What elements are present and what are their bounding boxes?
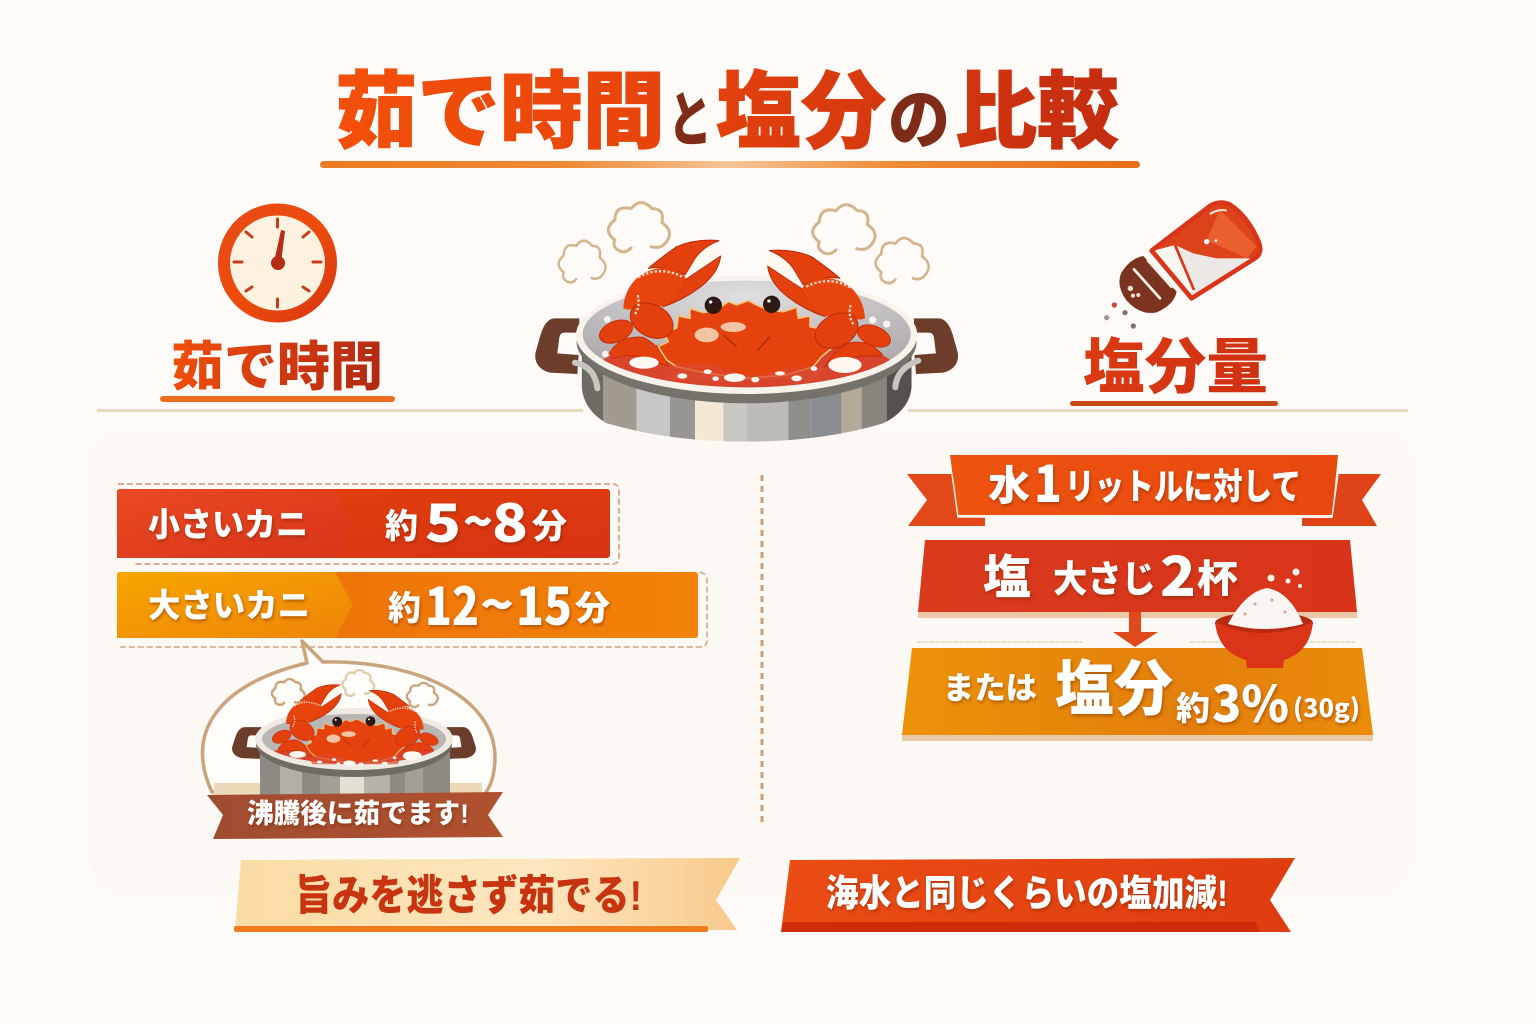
ribbon: per litre of water: 1 [1034,445,1062,517]
ribbon: keep the umami: 旨みを逃さず茹でる! [295,872,642,919]
pot handles [535,318,958,374]
time bar: small crab [117,482,619,564]
bar: two tablespoons of salt: 杯 [1197,559,1238,601]
time bar: small crab: 小さいカニ [148,506,308,543]
bar: two tablespoons of salt [918,533,1357,618]
section rule right [908,409,1408,412]
title: 比較 [955,65,1119,159]
ribbon: per litre of water: リットルに対して [1065,466,1301,507]
bar: two tablespoons of salt: 大さじ [1053,559,1156,600]
steam clouds [559,203,929,283]
pot side brackets [575,363,597,388]
icon: salt shaker [1104,197,1270,329]
time bar: small crab: ~ [463,483,493,555]
bar: or salinity about 3 percent: または [943,671,1037,706]
title [335,65,1119,159]
bar: or salinity about 3 percent: 3% [1212,665,1289,737]
time bar: small crab: 約 [385,508,418,546]
icon: clock [218,204,337,322]
bar: two tablespoons of salt: 塩 [983,551,1031,604]
time bar: small crab: 8 [492,482,528,557]
crab [596,240,894,382]
time bar: small crab: 5 [425,482,461,557]
ribbon: same as sea water: 海水と同じくらいの塩加減! [826,873,1228,914]
time bar: large crab: 15 [516,565,572,640]
time bar: large crab: 12 [425,565,479,640]
title: と [668,87,712,154]
icon: salt bowl [1215,568,1313,668]
ribbon: same as sea water [781,858,1295,932]
bar: or salinity about 3 percent [902,648,1373,741]
section rule left [97,409,583,412]
title underline [320,161,1140,168]
illustration: crab in pot [535,203,958,443]
bar: or salinity about 3 percent: 約 [1176,690,1210,727]
ribbon: per litre of water: 水 [988,463,1030,509]
small steam [272,670,438,707]
small pot [232,708,476,800]
title: 茹で時間 [335,65,665,159]
bar: or salinity about 3 percent: (30g) [1293,689,1360,725]
time bar: large crab: 大さいカニ [148,587,310,624]
separator lines [917,641,1355,643]
ribbon: after boiling [207,792,503,839]
ribbon: per litre of water [907,445,1381,526]
infographic canvas [97,68,1408,932]
time bar: large crab [117,565,707,647]
time bar: large crab: ~ [480,566,514,638]
content panel [90,430,1412,893]
speech bubble: boiling pot [202,641,495,800]
bar: two tablespoons of salt: 2 [1160,533,1196,612]
time bar: large crab: 分 [575,590,610,628]
ribbon: keep the umami [234,858,740,932]
time bar: small crab: 分 [532,508,567,546]
small crab [270,685,440,766]
title: の [888,83,950,157]
dashed centre divider [760,475,764,822]
heading: salt amount: 塩分量 [1083,334,1268,401]
bar: or salinity about 3 percent: 塩分 [1055,656,1173,723]
pot body stripes [582,356,912,442]
ribbon: after boiling: 沸騰後に茹でます! [247,799,469,829]
arrow down [1113,612,1158,647]
heading: boil time: 茹で時間 [171,338,383,397]
title: 塩分 [716,65,886,159]
heading underline: salt amount [1070,401,1278,406]
time bar: large crab: 約 [388,590,421,628]
pot rim [577,280,917,403]
heading underline: boil time [160,396,395,402]
